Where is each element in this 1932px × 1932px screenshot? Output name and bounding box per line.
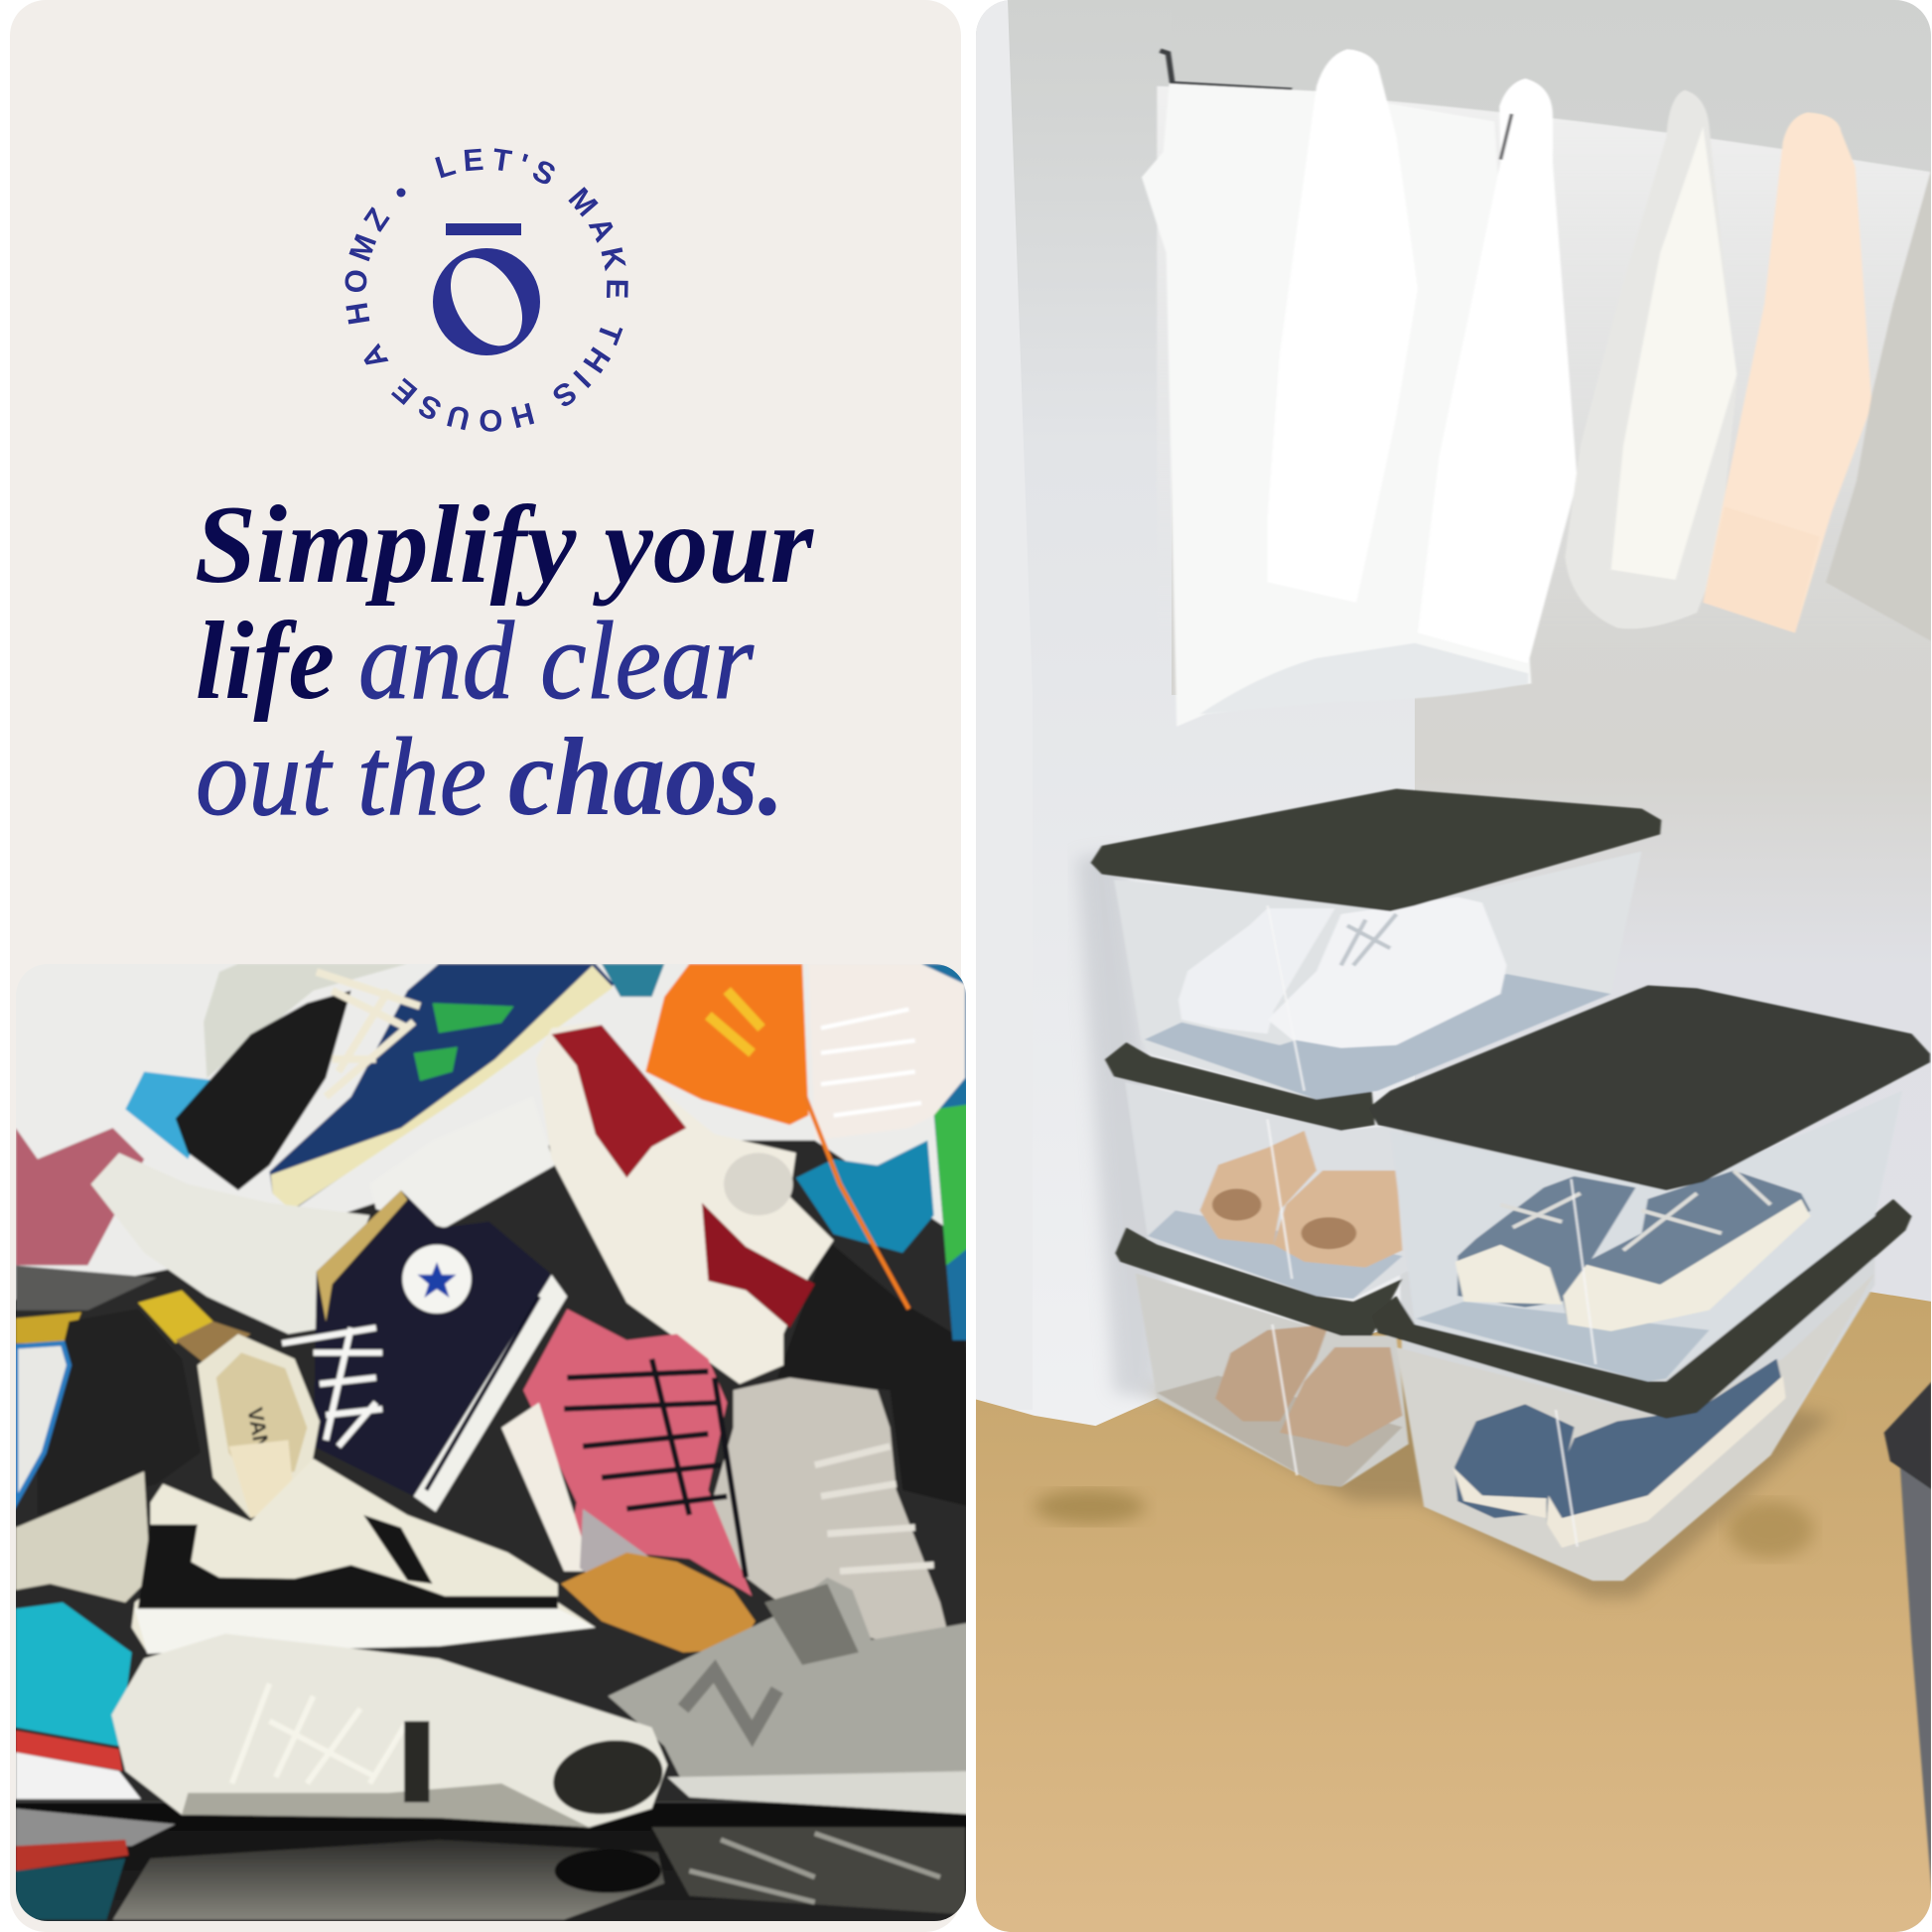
back wall	[976, 0, 1931, 1302]
shoe boxes stack	[1091, 788, 1932, 1894]
heading line 1: Simplify your	[195, 483, 814, 607]
logo letter o	[433, 245, 540, 358]
carpet floor	[973, 852, 1932, 1932]
grey white garment	[1565, 90, 1736, 628]
black shoe top	[176, 991, 351, 1190]
photo: messy pile of sneakers	[0, 953, 1003, 1932]
heading line 2 regular: and clear	[358, 600, 754, 723]
peach sweater	[1703, 112, 1871, 633]
vans shoe: VANS	[242, 1406, 276, 1466]
black shoe lower left	[16, 1318, 147, 1511]
blue and green shoe top right	[796, 964, 978, 1340]
white towel	[1497, 77, 1578, 657]
teal shoe left	[16, 1602, 141, 1799]
wall left strip	[976, 0, 1023, 1408]
translucent wall band under rail	[1156, 85, 1931, 504]
logo: circular badge	[345, 148, 628, 432]
hanging clothes	[1142, 49, 1932, 727]
box 3 sandals bottom	[1115, 1227, 1409, 1487]
box 5 blue sneakers bottom right	[1372, 1199, 1912, 1581]
grey hoodie	[1826, 167, 1932, 648]
white sleeve	[1314, 49, 1388, 105]
big white leather shoe	[111, 1634, 668, 1827]
rail hook	[1160, 51, 1292, 90]
grey running shoe	[608, 1578, 978, 1815]
floor reflection	[16, 1809, 965, 1920]
logo dot separator	[397, 189, 405, 197]
black shoe right	[777, 1240, 978, 1509]
wall column	[1008, 0, 1415, 1489]
photo: tidy closet with shoe boxes	[973, 0, 1932, 1932]
beige shoe left	[16, 1471, 151, 1602]
panel: left cream card	[10, 0, 961, 1932]
pink lace up shoe	[501, 1309, 756, 1652]
logo macron bar	[446, 223, 521, 235]
converse high top	[282, 1190, 567, 1512]
white shirt	[1142, 83, 1531, 727]
navy striped sneaker	[269, 964, 615, 1210]
dark pile backing	[0, 1141, 1003, 1802]
red and white chunky shoe	[536, 1022, 834, 1384]
vans shoe	[198, 1334, 320, 1518]
black and white low top	[132, 1458, 596, 1654]
heading line 3 regular: out the	[196, 716, 486, 839]
orange shoe	[645, 964, 808, 1125]
box stack backing	[1396, 1108, 1874, 1455]
pink shoe far left	[16, 1071, 219, 1311]
heading line 3 bold: chaos.	[508, 716, 784, 839]
box 2 tan sandals	[1105, 1042, 1415, 1299]
box 1 white sneakers top	[1091, 788, 1661, 1099]
trash bin	[1884, 1381, 1932, 1894]
heading: simplify your life and clear out the chaos	[195, 483, 814, 839]
box 4 grey blue sneakers	[1369, 985, 1930, 1381]
logo ring text: LET'S MAKE THIS HOUSE A HOMZ	[345, 148, 628, 432]
grey high top lower right	[708, 1378, 946, 1640]
white runner	[91, 1153, 369, 1334]
heading line 2 bold: life	[196, 600, 335, 723]
